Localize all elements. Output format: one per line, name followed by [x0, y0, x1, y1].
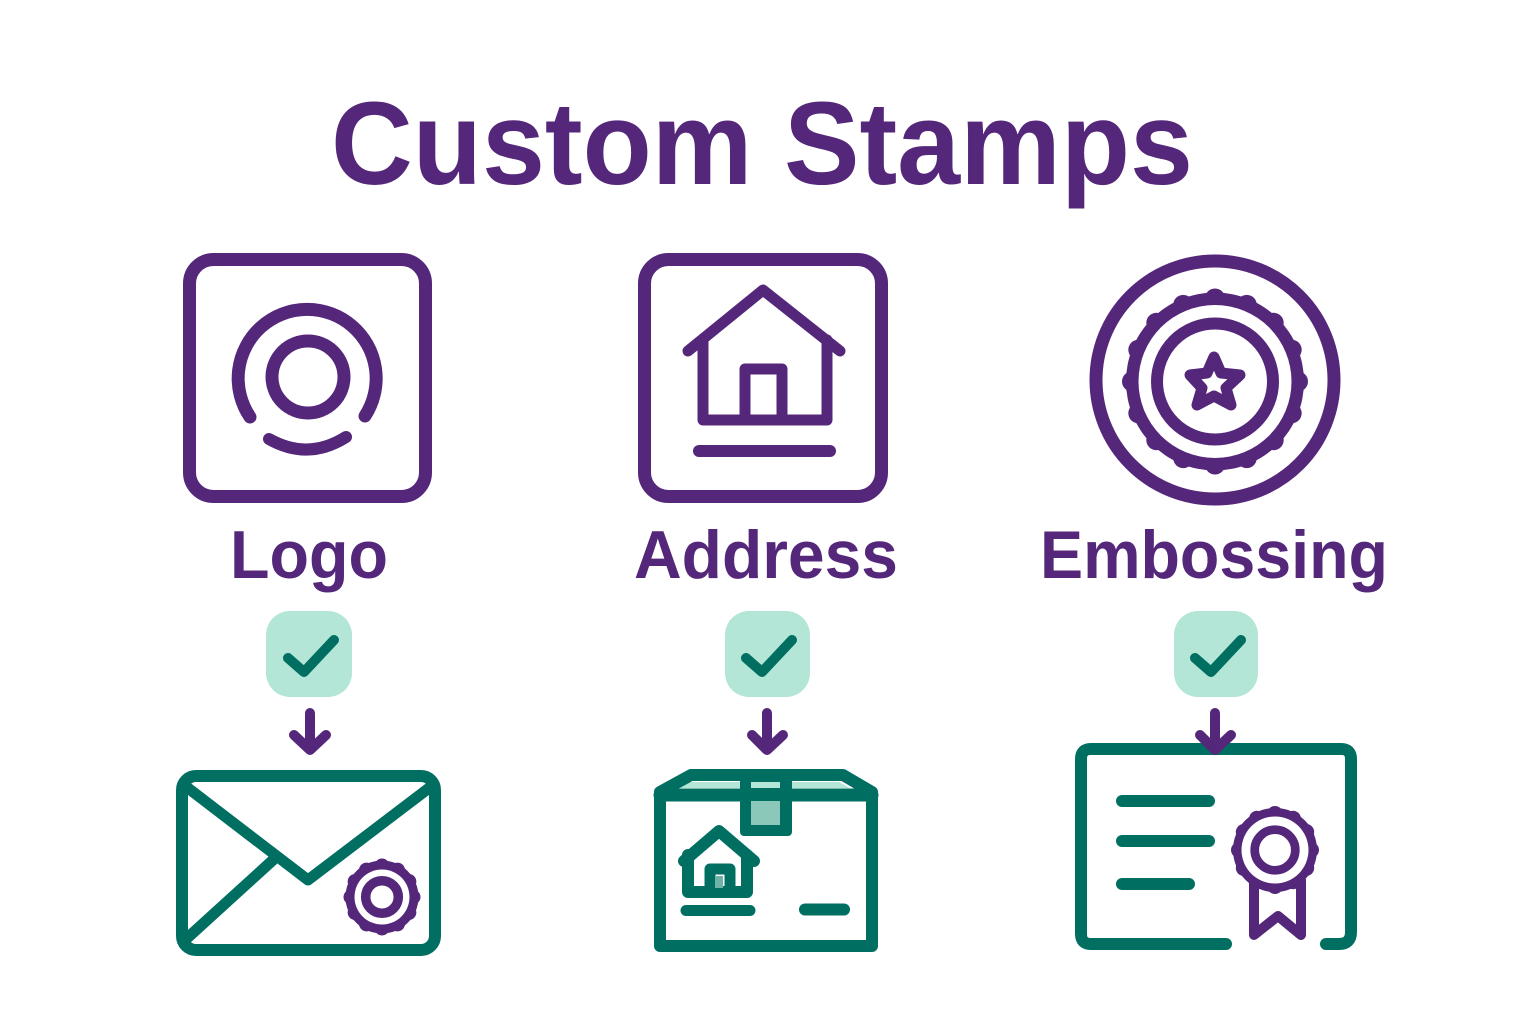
label: embossing: Embossing: [1040, 517, 1388, 593]
icon: check badge: [725, 611, 810, 697]
icon: address stamp: [644, 260, 882, 496]
arrow: address down: [752, 713, 783, 750]
icon: envelope with seal: [182, 776, 435, 950]
arrow: embossing down: [1200, 713, 1231, 750]
title: Custom Stamps: [331, 78, 1193, 210]
icon: check badge: [266, 611, 352, 697]
arrow: logo down: [294, 713, 326, 750]
panel: address column: [634, 260, 898, 946]
panel: embossing column: [1040, 261, 1388, 944]
icon: parcel box: [660, 770, 872, 946]
label: address: Address: [634, 517, 898, 593]
icon: logo stamp: [190, 260, 426, 496]
label: logo: Logo: [230, 517, 388, 593]
icon: certificate with seal: [1081, 749, 1351, 944]
icon: embossing stamp: [1096, 261, 1334, 499]
panel: logo column: [182, 260, 435, 950]
icon: check badge: [1174, 611, 1258, 697]
